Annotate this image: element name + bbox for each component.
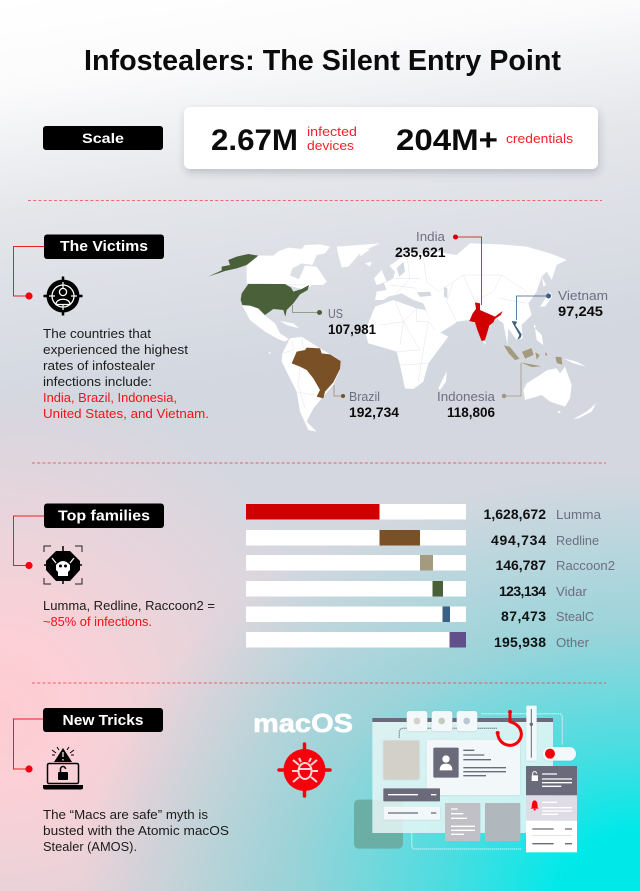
callout: Indonesia bbox=[437, 363, 521, 420]
heading: New Tricks bbox=[43, 708, 163, 732]
bar chart bbox=[246, 504, 615, 650]
text: tricks description: The “Macs are safe” myth is bbox=[43, 808, 208, 822]
teal square bbox=[354, 800, 403, 849]
panel: profile card bbox=[427, 740, 520, 795]
row: StealC bbox=[246, 606, 594, 624]
row: Lumma: Lumma bbox=[556, 508, 601, 522]
row: Other bbox=[246, 632, 589, 650]
row: Lumma bbox=[246, 504, 601, 522]
callout: US: US bbox=[328, 307, 343, 321]
callout: Indonesia: Indonesia bbox=[437, 390, 495, 404]
text: victims description: infections include: bbox=[43, 375, 152, 389]
icon: laptop alert bbox=[43, 747, 83, 790]
text: tricks description: busted with the Atomic macOS bbox=[43, 824, 229, 838]
row: Vidar: Vidar bbox=[556, 585, 587, 599]
country: United States bbox=[208, 254, 309, 317]
callout: India: 235,621 bbox=[395, 244, 446, 260]
text: families description: Lumma, Redline, Raccoon2 = bbox=[43, 599, 215, 613]
connector: families bbox=[14, 516, 44, 569]
title: Infostealers: The Silent Entry Point bbox=[84, 45, 561, 77]
illustration: browser windows with hook bbox=[354, 706, 577, 852]
heading: Scale: Scale bbox=[82, 130, 124, 146]
row: Redline: 494,734 bbox=[491, 532, 546, 548]
row: Vidar: 123,134 bbox=[499, 583, 546, 599]
panel: scale stats: 204M+ bbox=[396, 124, 498, 157]
icon: red bug target bbox=[279, 744, 330, 796]
icon: skull target bbox=[44, 546, 82, 584]
country: India bbox=[469, 302, 503, 341]
row: Raccoon2: Raccoon2 bbox=[556, 559, 615, 573]
text: victims description bbox=[43, 327, 209, 421]
connector: victims bbox=[14, 246, 44, 300]
panel: grey text card bbox=[445, 803, 480, 841]
row: Other: 195,938 bbox=[494, 634, 546, 650]
section: top families bbox=[14, 504, 615, 650]
dotted connectors bbox=[412, 714, 562, 849]
row: Redline bbox=[246, 530, 599, 548]
callout: India bbox=[395, 230, 482, 305]
row: Raccoon2: 146,787 bbox=[496, 557, 546, 573]
callout: Vietnam bbox=[516, 289, 608, 320]
callout: US bbox=[292, 305, 376, 337]
text: tricks description bbox=[43, 808, 229, 854]
country: Brazil bbox=[292, 348, 341, 398]
label: macOS: macOS bbox=[253, 708, 353, 738]
panel: scale stats: 2.67M bbox=[211, 124, 298, 157]
land: Americas bbox=[208, 243, 380, 432]
icon: target person bbox=[44, 276, 82, 316]
heading: New Tricks: New Tricks bbox=[62, 713, 144, 729]
country: Indonesia bbox=[503, 345, 563, 367]
callout: Brazil: 192,734 bbox=[349, 404, 399, 420]
toolbar tiles bbox=[407, 711, 477, 731]
panel: scale stats: devices bbox=[307, 139, 354, 153]
heading: Top families: Top families bbox=[58, 508, 150, 524]
panel: scale stats bbox=[184, 107, 598, 169]
text: victims description: The countries that bbox=[43, 327, 152, 341]
connector: tricks bbox=[14, 719, 43, 773]
callout: Vietnam: 97,245 bbox=[558, 303, 603, 319]
panel: grey box bbox=[485, 803, 520, 841]
section: the victims bbox=[14, 230, 608, 432]
world map bbox=[208, 243, 596, 432]
text: victims description: United States, and Vietnam. bbox=[43, 407, 209, 421]
slider bbox=[526, 706, 537, 761]
icon: red hook bbox=[496, 710, 521, 745]
callout: India: India bbox=[416, 230, 445, 244]
row: Lumma: 1,628,672 bbox=[484, 506, 546, 522]
heading: The Victims bbox=[44, 234, 164, 259]
callout: Brazil: Brazil bbox=[349, 390, 380, 404]
panel: dark field bbox=[383, 788, 440, 801]
panel: scale stats: infected bbox=[307, 125, 357, 139]
callout: Brazil bbox=[334, 385, 399, 420]
row: StealC: StealC bbox=[556, 610, 594, 624]
text: victims description: rates of infostealer bbox=[43, 359, 155, 373]
row: Other: Other bbox=[556, 636, 589, 650]
text: tricks description: Stealer (AMOS). bbox=[43, 840, 137, 854]
row: StealC: 87,473 bbox=[501, 608, 546, 624]
row: Redline: Redline bbox=[556, 534, 599, 548]
land: East Asia and Oceania bbox=[469, 245, 596, 419]
text: families description: ~85% of infections. bbox=[43, 615, 152, 629]
browser window bbox=[372, 718, 553, 833]
panel: beige box bbox=[383, 740, 419, 779]
land: Africa and Eurasia bbox=[360, 243, 567, 390]
section: scale bbox=[43, 107, 598, 169]
heading: Top families bbox=[44, 504, 164, 528]
text: victims description: India, Brazil, Indonesia, bbox=[43, 391, 177, 405]
notification stack bbox=[526, 766, 577, 852]
text: families description bbox=[43, 599, 215, 629]
heading: The Victims: The Victims bbox=[60, 239, 148, 255]
callout: Vietnam: Vietnam bbox=[558, 289, 608, 303]
heading: Scale bbox=[43, 126, 163, 150]
callout: Indonesia: 118,806 bbox=[447, 404, 495, 420]
text: victims description: experienced the highest bbox=[43, 343, 189, 357]
callout: US: 107,981 bbox=[328, 321, 376, 337]
panel: light field bbox=[384, 807, 440, 820]
section: new tricks bbox=[14, 706, 577, 854]
row: Vidar bbox=[246, 581, 587, 599]
panel: scale stats: credentials bbox=[506, 132, 573, 146]
row: Raccoon2 bbox=[246, 555, 615, 573]
country: Vietnam bbox=[512, 321, 522, 340]
toggle bbox=[543, 747, 576, 761]
